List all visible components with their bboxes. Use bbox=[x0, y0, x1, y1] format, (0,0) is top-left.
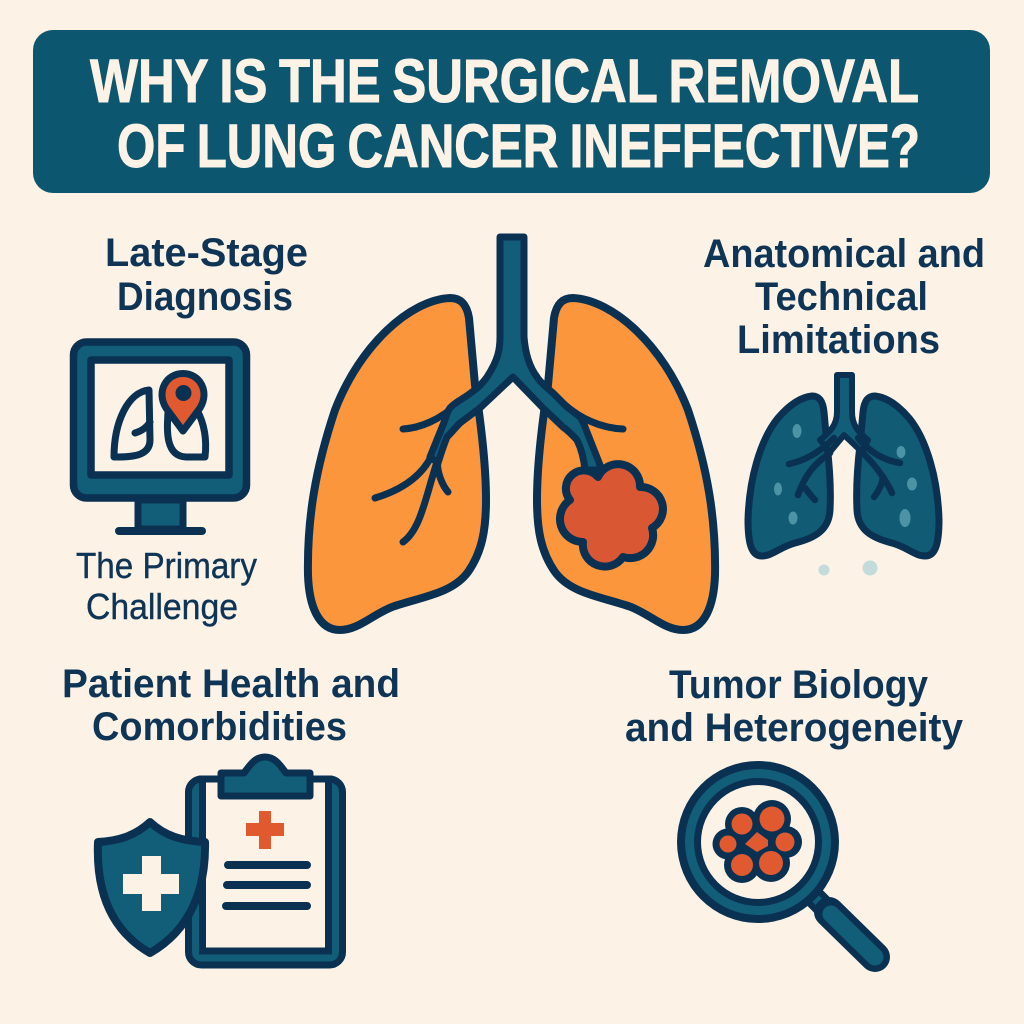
central lungs illustration with tumor bbox=[308, 237, 715, 630]
clipboard clip bbox=[221, 757, 310, 796]
left lung bbox=[308, 298, 486, 630]
heading: anatomical and technical limitations: Limitations bbox=[737, 318, 940, 362]
heading: anatomical and technical limitations bbox=[703, 232, 985, 362]
caption: the primary challenge bbox=[76, 545, 257, 627]
icon: clipboard bbox=[188, 757, 342, 965]
heading: late-stage diagnosis: Late-Stage bbox=[105, 231, 308, 275]
right bronchial branch bbox=[565, 405, 623, 429]
heading: tumor biology and heterogeneity: Tumor Biology bbox=[669, 663, 929, 707]
icon: magnifying glass over cells bbox=[677, 761, 875, 957]
heading: late-stage diagnosis: Diagnosis bbox=[117, 275, 293, 319]
caption: the primary challenge: Challenge bbox=[86, 586, 238, 627]
heading: anatomical and technical limitations: Technical bbox=[755, 275, 928, 319]
cell cluster backing bbox=[712, 800, 802, 883]
icon: medical shield bbox=[98, 822, 205, 953]
text lines bbox=[226, 865, 307, 906]
title banner bbox=[33, 30, 990, 193]
icon: dark lungs bbox=[748, 375, 939, 556]
tumor bbox=[560, 464, 663, 567]
heading: patient health and comorbidities bbox=[62, 662, 400, 749]
trachea and bronchi bbox=[430, 237, 602, 470]
icon: location pin bbox=[162, 374, 204, 431]
heading: late-stage diagnosis bbox=[105, 231, 308, 319]
heading: anatomical and technical limitations: Anatomical and bbox=[703, 232, 985, 276]
heading: tumor biology and heterogeneity bbox=[625, 663, 964, 750]
title text bbox=[90, 47, 920, 180]
icon: monitor with lung scan bbox=[74, 342, 246, 531]
left bronchial branches bbox=[375, 403, 458, 542]
heading: patient health and comorbidities: Comorbidities bbox=[92, 705, 347, 749]
tumor cells bbox=[720, 806, 794, 876]
lung spots bbox=[774, 424, 917, 527]
caption: the primary challenge: The Primary bbox=[76, 545, 257, 586]
orange medical cross bbox=[246, 811, 284, 849]
heading: patient health and comorbidities: Patient Health and bbox=[62, 662, 400, 706]
heading: tumor biology and heterogeneity: and Heterogeneity bbox=[625, 706, 964, 750]
right lung bbox=[537, 298, 715, 630]
floating dots bbox=[818, 560, 878, 576]
